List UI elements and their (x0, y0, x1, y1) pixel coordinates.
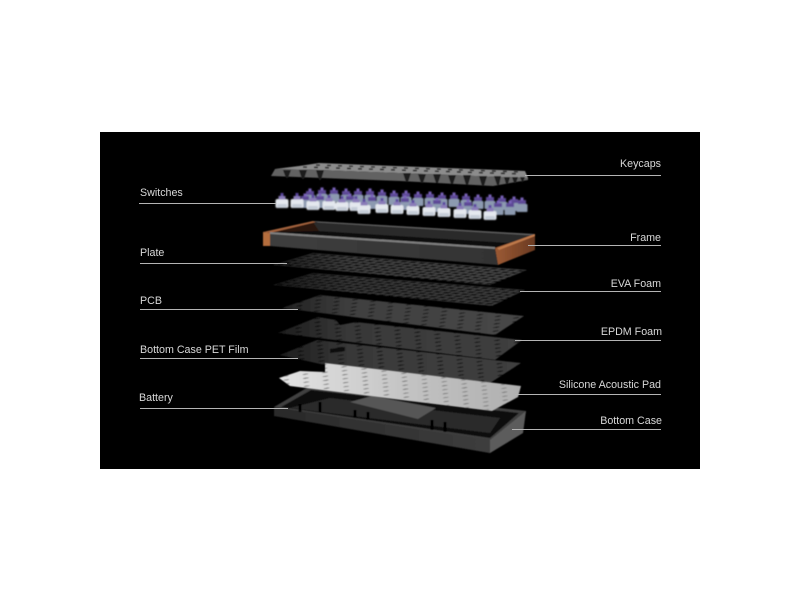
label: EPDM Foam: EPDM Foam (601, 326, 662, 338)
plate layer (273, 253, 527, 285)
label: Frame: Frame (630, 232, 661, 244)
EVA foam layer (273, 273, 525, 306)
label: Switches: Switches (140, 187, 183, 199)
label: Battery: Battery (139, 392, 174, 404)
bottom case layer (274, 386, 526, 453)
label: Switches (139, 187, 276, 204)
PCB layer (282, 295, 524, 335)
switches layer (276, 188, 528, 220)
keycaps layer (271, 163, 528, 186)
frame layer (263, 221, 535, 265)
label: Bottom Case PET Film: Bottom Case PET Film (140, 344, 249, 356)
EPDM foam layer (278, 317, 522, 360)
label: Keycaps: Keycaps (620, 158, 661, 170)
label: Bottom Case: Bottom Case (600, 415, 662, 427)
silicone acoustic pad layer (279, 363, 521, 411)
label: EVA Foam: EVA Foam (611, 278, 661, 290)
bottom case PET film layer (280, 340, 521, 383)
label: Plate: Plate (140, 247, 164, 259)
label: Keycaps (525, 158, 661, 176)
label: PCB: PCB (140, 295, 162, 307)
background panel (100, 132, 700, 469)
label: Silicone Acoustic Pad: Silicone Acoustic Pad (559, 379, 661, 391)
label: Frame (528, 232, 661, 246)
